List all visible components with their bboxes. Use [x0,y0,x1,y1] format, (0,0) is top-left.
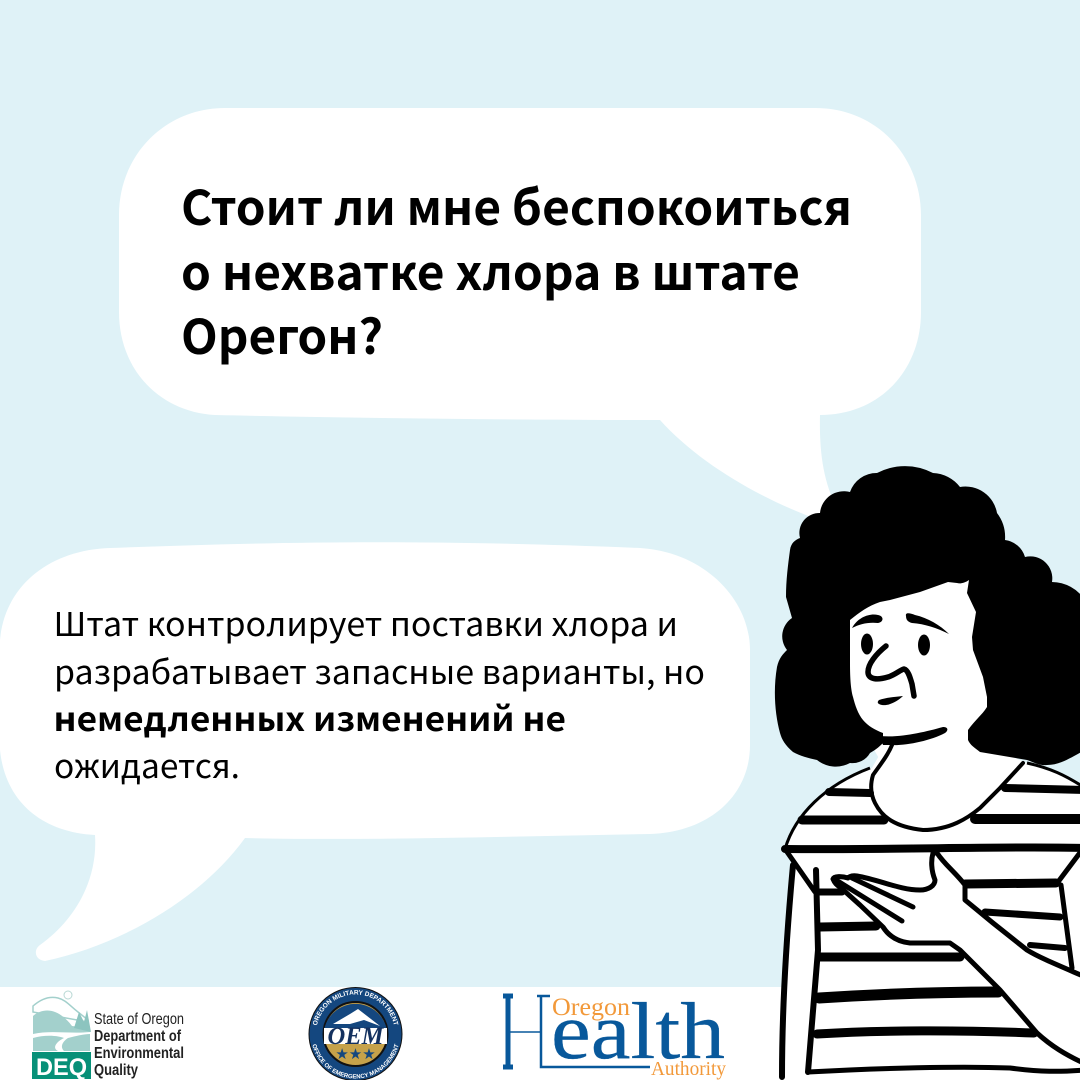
logo: Oregon DEQ [32,991,184,1080]
logo: Oregon Health Authority: ealth [551,988,725,1076]
illustration: worried woman in a striped shirt [775,466,1080,1080]
face features [852,613,949,745]
question speech bubble [119,108,921,530]
shoulder lines [785,763,1080,849]
heading [181,169,852,368]
shirt stripes [785,788,1080,1034]
nose [868,646,914,696]
logo: Oregon Health Authority: Authority [651,1058,726,1080]
logo: OEM seal [308,987,402,1080]
answer text: ожидается. [54,740,240,788]
logo: OEM seal: OFFICE OF EMERGENCY MANAGEMENT [312,1044,398,1078]
DEQ agency name [94,1011,184,1079]
answer text: немедленных изменений не [54,693,566,741]
hand and forearm [833,853,1080,1066]
DEQ badge [32,1052,91,1079]
answer text: Штат контролирует поставки хлора и [54,598,678,646]
heading: Стоит ли мне беспокоиться [181,169,852,239]
DEQ agency name: Department of [94,1028,182,1045]
answer text [54,598,705,788]
sleeves, torso and arm outlines [782,846,1080,1077]
answer text: разрабатывает запасные варианты, но [54,646,705,694]
heading: о нехватке хлора в штате [181,234,800,304]
logo: OEM seal: OEM [328,1023,384,1050]
DEQ agency name: Quality [94,1062,138,1079]
answer speech bubble [0,542,750,961]
logo: OEM seal: OREGON MILITARY DEPARTMENT [313,990,398,1025]
fingers [836,878,913,921]
body silhouette [782,745,1080,1080]
DEQ agency name: Environmental [94,1045,184,1062]
logo: Oregon Health Authority [503,988,726,1080]
DEQ agency name: State of Oregon [94,1011,184,1028]
logo: Oregon Health Authority: Oregon [552,994,631,1021]
DEQ landscape mark [33,991,91,1051]
face [845,570,995,760]
logo: OEM seal: ★★★ [335,1045,376,1063]
hair [775,466,1080,767]
neck and collar [871,745,1023,830]
heading: Орегон? [181,298,383,368]
